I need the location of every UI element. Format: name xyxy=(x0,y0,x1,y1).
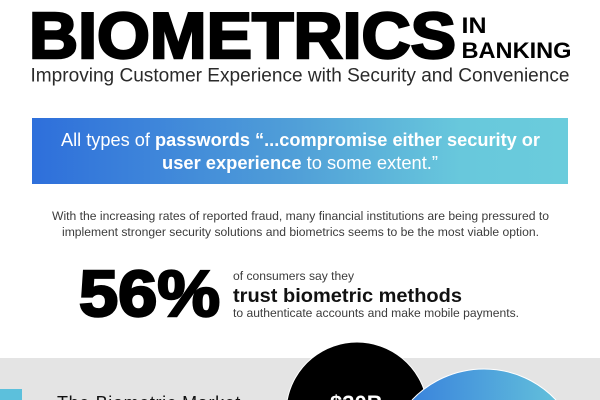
stat number: 56% xyxy=(79,257,220,330)
circle: black market value xyxy=(287,342,427,400)
intro text: With the increasing rates of reported fraud, many financial institutions are being pressured to xyxy=(52,209,549,223)
panel: biometric market xyxy=(0,342,600,400)
stat label line 3: to authenticate accounts and make mobile payments. xyxy=(233,306,519,320)
heading suffix: banking: BANKING xyxy=(462,38,572,63)
stat label line 1: of consumers say they xyxy=(233,269,355,283)
title xyxy=(29,0,572,72)
main heading: BIOMETRICS xyxy=(29,0,456,72)
panel: quote banner xyxy=(32,118,568,184)
intro text: implement stronger security solutions and biometrics seems to be the most viable option. xyxy=(62,225,539,239)
quote line 2: user experience to some extent.” xyxy=(162,153,438,173)
subtitle: Improving Customer Experience with Security and Convenience xyxy=(30,66,570,86)
circle: blue market value xyxy=(412,369,556,400)
stat label emphasis: trust biometric methods xyxy=(233,285,462,307)
heading suffix: in: IN xyxy=(462,13,486,38)
intro text xyxy=(52,209,549,239)
quote line 1: All types of passwords “...compromise either security or xyxy=(61,130,540,150)
accent square xyxy=(0,389,22,400)
stat: 56 percent xyxy=(79,257,519,330)
